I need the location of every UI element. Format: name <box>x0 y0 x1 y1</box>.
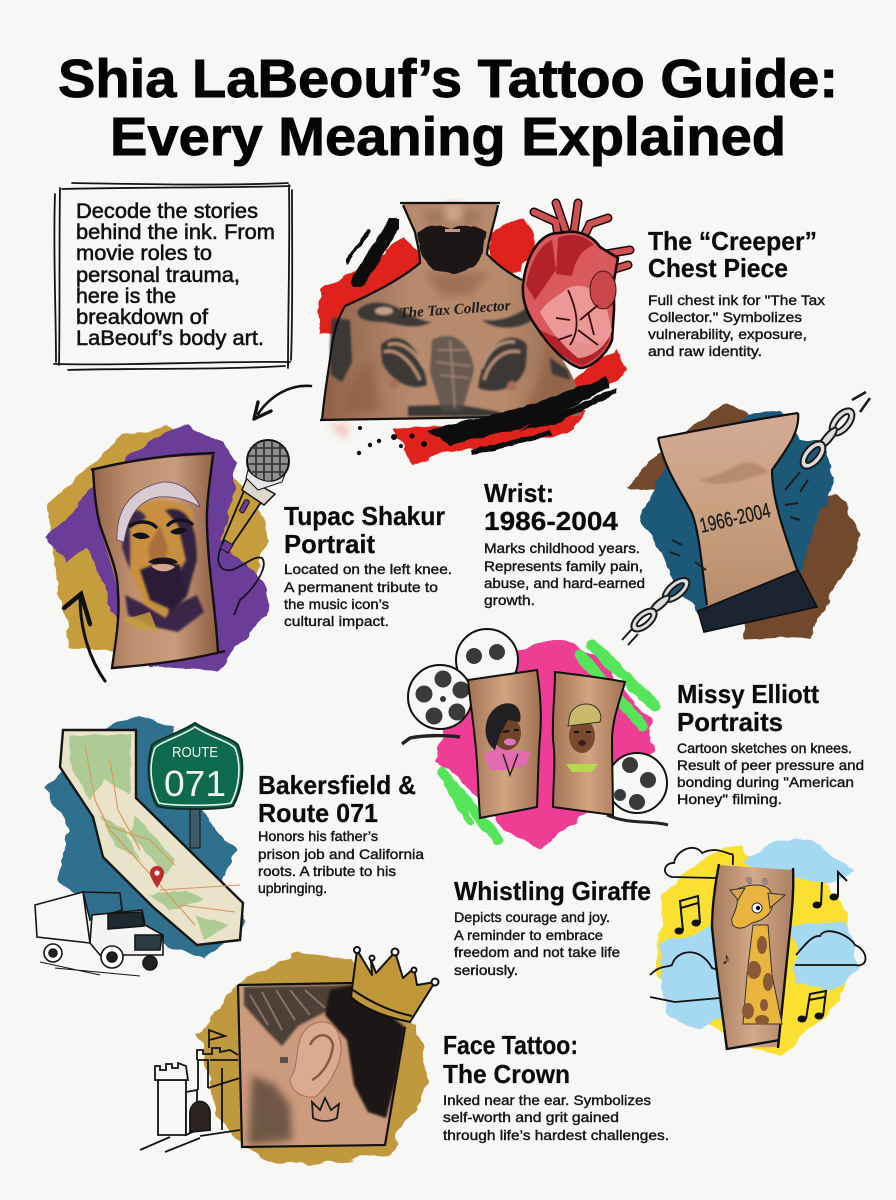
text: Tupac Shakur: Tupac Shakur <box>284 501 445 531</box>
right portrait <box>566 704 601 772</box>
film reels <box>402 629 518 744</box>
panel: crown face tattoo illustration <box>140 947 438 1166</box>
lower broken chain <box>622 540 706 645</box>
portrait tattoo <box>117 482 204 632</box>
arrow: chest to Tupac <box>254 386 311 419</box>
panel: Missy Elliott knees illustration <box>402 629 668 848</box>
forearm <box>658 413 798 607</box>
text: Wrist 1986-2004 <box>484 478 645 608</box>
text: Missy Elliott: Portraits <box>677 707 783 737</box>
blue paint <box>47 714 245 958</box>
neck crown tattoo <box>312 1098 339 1121</box>
text: Missy Elliott: Missy Elliott <box>677 679 819 709</box>
title: Shia LaBeouf’s Tattoo Guide: <box>58 49 838 109</box>
cuff <box>698 570 817 632</box>
text: creeper chest piece: The “Creeper” <box>648 226 817 256</box>
pink and green paint <box>436 638 655 848</box>
intro callout box <box>54 183 292 370</box>
intro callout box: behind the ink. From <box>76 221 275 244</box>
microphone <box>218 440 289 615</box>
yellow and blue paint <box>655 838 862 1056</box>
text: Wrist 1986-2004: Represents family pain, <box>484 558 643 574</box>
panel: Tupac knee illustration <box>46 424 289 681</box>
intro callout box: movie roles to <box>76 242 212 265</box>
neck tattoo text: The Tax Collector <box>399 298 511 322</box>
title <box>58 49 838 167</box>
panel: creeper chest illustration <box>320 203 630 463</box>
brown and blue paint <box>628 402 860 640</box>
left portrait <box>484 703 530 775</box>
pale smudge <box>328 424 350 440</box>
text: Face Tattoo <box>443 1030 669 1143</box>
text: creeper chest piece: Full chest ink for "The Tax <box>648 292 825 308</box>
right knee <box>553 672 625 815</box>
hair <box>244 985 405 1145</box>
text: Face Tattoo: through life’s hardest challenges. <box>443 1127 669 1143</box>
text: Wrist 1986-2004: 1986-2004 <box>484 506 619 536</box>
text: Tupac Shakur <box>284 501 452 629</box>
text: creeper chest piece: Collector." Symbolizes <box>648 309 802 325</box>
wrist tattoo text: 1966-2004 <box>697 499 773 538</box>
calf <box>712 865 793 1048</box>
text: Bakersfield <box>258 770 424 896</box>
text: Tupac Shakur: cultural impact. <box>284 613 389 629</box>
text: Face Tattoo: Inked near the ear. Symbolizes <box>443 1092 651 1108</box>
head photo <box>238 983 405 1147</box>
text: Whistling Giraffe: A reminder to embrace <box>454 927 603 943</box>
text: Bakersfield: Route 071 <box>258 798 378 828</box>
truck <box>35 892 163 976</box>
ear <box>290 1022 341 1097</box>
beard <box>418 226 486 273</box>
intro callout box: breakdown of <box>76 306 208 329</box>
route sign: 071 <box>164 763 226 804</box>
text: Bakersfield: upbringing. <box>258 880 327 896</box>
music notes <box>674 872 847 1022</box>
paint dots <box>357 426 427 455</box>
text: Wrist 1986-2004: growth. <box>484 592 535 608</box>
text: creeper chest piece <box>648 226 825 359</box>
text: Missy Elliott: bonding during "American <box>677 774 854 790</box>
text: Missy Elliott <box>677 679 864 807</box>
upper black brush <box>347 224 394 281</box>
text: Wrist 1986-2004: Wrist: <box>484 478 554 508</box>
panel: giraffe leg illustration <box>650 838 866 1056</box>
text: Missy Elliott: Honey" filming. <box>677 791 782 807</box>
text: Wrist 1986-2004: abuse, and hard-earned <box>484 575 645 591</box>
text: Face Tattoo: self-worth and grit gained <box>443 1109 619 1125</box>
intro callout box: here is the <box>76 285 176 308</box>
text: Tupac Shakur: A permanent tribute to <box>284 579 438 595</box>
left knee <box>468 670 541 818</box>
map terrain <box>68 735 230 940</box>
gold crown <box>351 950 435 1022</box>
curved arrow <box>64 594 105 681</box>
text: Bakersfield: prison job and California <box>258 846 424 862</box>
clouds <box>650 848 866 1002</box>
castle sketch <box>140 1030 240 1152</box>
text: Missy Elliott: Cartoon sketches on knees. <box>677 740 852 756</box>
location pin <box>150 866 164 888</box>
text: Tupac Shakur: the music icon’s <box>284 596 389 612</box>
intro callout box: LaBeouf’s body art. <box>76 327 264 350</box>
text: Face Tattoo: Face Tattoo: <box>443 1030 578 1060</box>
text: Tupac Shakur: Portrait <box>284 529 375 559</box>
text: Missy Elliott: Result of peer pressure and <box>677 757 864 773</box>
lower black brush strokes <box>427 377 618 456</box>
text: Bakersfield: Bakersfield & <box>258 770 416 800</box>
panel: wrist illustration <box>622 392 870 645</box>
text: creeper chest piece: and raw identity. <box>648 343 762 359</box>
torso <box>322 204 582 420</box>
torso sketch outline <box>320 203 522 421</box>
gold and purple paint <box>46 424 268 672</box>
red paint splashes <box>320 218 624 463</box>
text: Whistling Giraffe: freedom and not take life <box>454 944 620 960</box>
knee <box>93 455 218 667</box>
chest tattoo shading <box>330 303 570 416</box>
route sign <box>149 723 242 848</box>
intro callout box: Decode the stories <box>76 200 258 223</box>
text: creeper chest piece: vulnerability, exposure, <box>648 326 807 342</box>
text: Whistling Giraffe: Depicts courage and joy. <box>454 909 610 925</box>
anatomical heart <box>523 203 630 368</box>
text: Whistling Giraffe: Whistling Giraffe <box>454 876 651 906</box>
upper broken chain <box>785 392 870 520</box>
text: Bakersfield: roots. A tribute to his <box>258 863 396 879</box>
giraffe tattoo <box>722 876 785 1025</box>
text: Whistling Giraffe <box>454 876 651 978</box>
route sign: ROUTE <box>172 744 218 761</box>
intro callout box: personal trauma, <box>76 264 240 287</box>
text: Tupac Shakur: Located on the left knee. <box>284 561 452 577</box>
text: Bakersfield: Honors his father’s <box>258 828 378 844</box>
text: creeper chest piece: Chest Piece <box>648 253 788 283</box>
text: Whistling Giraffe: seriously. <box>454 962 518 978</box>
text: Wrist 1986-2004: Marks childhood years. <box>484 540 640 556</box>
gold paint <box>198 952 428 1166</box>
title: Every Meaning Explained <box>110 107 786 167</box>
giraffe tattoo: ♪ <box>722 951 730 968</box>
state outline <box>60 730 243 945</box>
lower right film reel <box>607 753 668 825</box>
panel: California map illustration <box>35 714 245 976</box>
text: Face Tattoo: The Crown <box>443 1059 570 1089</box>
